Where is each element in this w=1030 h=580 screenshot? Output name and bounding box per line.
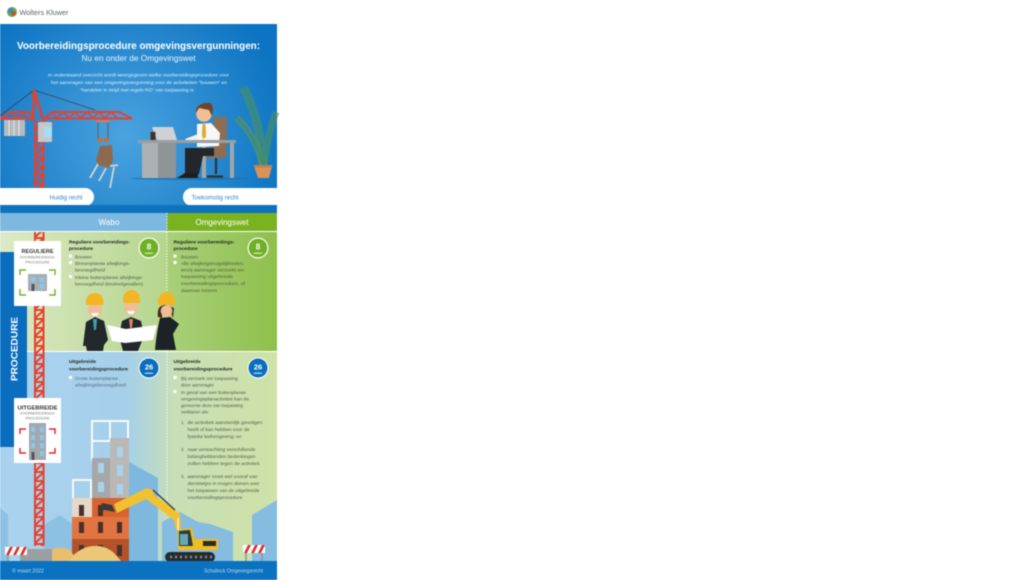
text: reguliere, Omgevingswet: procedure xyxy=(174,246,198,252)
text: reguliere, Wabo: Reguliere voorbereidings- xyxy=(69,240,130,246)
text: reguliere, Wabo: Kleine buitenplanse afwijkings- xyxy=(75,275,143,280)
text: uitgebreide, Omgevingswet: voorbereidingsprocedure xyxy=(188,495,243,500)
intro text: In onderstaand overzicht wordt weergegeven welke voorbereidingsprocedure voor xyxy=(48,72,230,78)
worker left xyxy=(83,293,108,351)
text: uitgebreide, Omgevingswet: voorbereidingsprocedure xyxy=(174,366,233,372)
card: uitgebreide voorbereidingsprocedure: PROCEDURE xyxy=(25,416,50,420)
badge: 26 weken, Omgevingswet: weken xyxy=(253,371,263,375)
text: uitgebreide, Wabo: voorbereidingsprocedure xyxy=(69,366,128,372)
text: uitgebreide, Omgevingswet: Bij verzoek om toepassing xyxy=(181,376,238,381)
head xyxy=(196,103,213,122)
badge: 26 weken, Wabo xyxy=(138,358,160,378)
text: uitgebreide, Wabo: Grote buitenplanse xyxy=(75,376,118,381)
illustration: man at desk xyxy=(130,87,276,180)
text: uitgebreide, Omgevingswet: 1. xyxy=(181,420,185,425)
subtitle: Nu en onder de Omgevingswet xyxy=(82,54,196,63)
card: uitgebreide voorbereidingsprocedure: VOORBEREIDINGS- xyxy=(20,412,56,416)
text: reguliere, Omgevingswet: Bouwen xyxy=(181,254,198,260)
text: uitgebreide, Wabo: Uitgebreide xyxy=(69,359,96,365)
text: reguliere, Omgevingswet: Reguliere voorbereidings- xyxy=(174,240,235,246)
footer: © maart 2022 xyxy=(12,568,44,574)
text: reguliere, Omgevingswet: voorbereidingsprocedure, of xyxy=(181,281,246,286)
text: uitgebreide, Omgevingswet: dienstwijze in mogen dienen over xyxy=(188,481,260,486)
intro text: "handelen in strijd met regels RO" van toepassing is. xyxy=(80,88,195,92)
text: uitgebreide, Wabo: afwijkingsbevoegdheid xyxy=(75,382,126,388)
barrier right xyxy=(243,545,265,561)
badge: 8 weken, Omgevingswet xyxy=(248,238,268,258)
badge: 26 weken, Omgevingswet xyxy=(248,358,268,378)
text: uitgebreide, Omgevingswet: fysieke leefomgeving; en xyxy=(188,434,242,439)
text: uitgebreide, Omgevingswet: 2. xyxy=(181,447,185,452)
text: reguliere, Omgevingswet: Alle afwijkingsmogelijkheden, xyxy=(181,261,244,266)
torso xyxy=(185,123,220,147)
column header: Wabo: Wabo xyxy=(98,218,120,227)
barrier left xyxy=(5,547,27,561)
text: reguliere, Wabo: bevoegdheid (kruimelgevallen) xyxy=(75,282,143,286)
illustration: three workers with plan xyxy=(83,290,179,351)
badge: 8 weken, Wabo: 8 xyxy=(147,242,152,252)
text: uitgebreide, Omgevingswet: Uitgebreide xyxy=(174,359,201,365)
crane load: container xyxy=(4,120,25,136)
trousers and shoes xyxy=(177,148,214,178)
crane cabin xyxy=(38,122,52,142)
card: reguliere voorbereidingsprocedure: VOORBEREIDINGS- xyxy=(20,256,56,260)
text: uitgebreide, Omgevingswet: 3. xyxy=(181,474,185,479)
worker right xyxy=(155,292,179,350)
text: reguliere, Omgevingswet xyxy=(174,240,246,293)
text: uitgebreide, Wabo xyxy=(69,359,128,388)
sidebar: procedure xyxy=(0,252,27,447)
badge: 8 weken, Omgevingswet: weken xyxy=(253,251,263,255)
worker centre xyxy=(119,290,144,351)
intro text xyxy=(48,72,230,92)
panel: row 1 backgrounds xyxy=(0,232,277,351)
badge: 8 weken, Wabo xyxy=(138,238,160,258)
card: reguliere voorbereidingsprocedure xyxy=(14,241,61,306)
desk xyxy=(142,143,234,178)
text: uitgebreide, Omgevingswet: naar verwachting verschillende xyxy=(188,447,256,452)
column header: Omgevingswet xyxy=(167,213,277,231)
panel: header hero xyxy=(0,24,277,205)
text: uitgebreide, Omgevingswet: door aanvrager xyxy=(181,382,214,388)
text: uitgebreide, Omgevingswet: de activiteit aanzienlijk gevolgen xyxy=(188,420,263,425)
text: reguliere, Omgevingswet: tenzij aanvrager verzoekt om xyxy=(181,268,244,272)
column header: Wabo xyxy=(0,213,167,231)
panel: row 2 backgrounds xyxy=(0,352,277,561)
footer: Schulinck Omgevingsrecht xyxy=(204,568,264,574)
text: uitgebreide, Omgevingswet: omgevingsplanactiviteit kan de xyxy=(181,396,249,402)
badge: 26 weken, Omgevingswet: 26 xyxy=(254,362,262,372)
text: reguliere, Wabo xyxy=(69,240,143,286)
badge: 8 weken, Wabo: weken xyxy=(144,251,154,255)
intro text: het aanvragen van een omgevingsvergunning voor de activiteiten "bouwen" en xyxy=(51,80,228,85)
text: reguliere, Wabo: procedure xyxy=(69,246,93,252)
illustration: building under construction xyxy=(72,421,129,561)
text: reguliere, Wabo: bevoegdheid xyxy=(75,268,106,272)
text: reguliere, Omgevingswet: toepassing uitgebreide xyxy=(181,274,233,279)
plan xyxy=(107,325,157,343)
plant xyxy=(237,87,276,178)
card: uitgebreide voorbereidingsprocedure xyxy=(14,398,61,463)
text: reguliere, Wabo: Binnenplanse afwijkings- xyxy=(75,261,131,266)
chair xyxy=(190,117,227,176)
text: reguliere, Wabo: Bouwen xyxy=(75,254,92,260)
logo: Wolters Kluwer: Wolters Kluwer xyxy=(20,8,69,17)
illustration: pipes xyxy=(20,549,52,561)
crane hook with excavator bucket xyxy=(90,120,118,188)
text: uitgebreide, Omgevingswet: aanvrager moet wel vooraf van xyxy=(188,474,258,479)
illustration: sand piles xyxy=(39,546,121,561)
pill: Huidig recht: Huidig recht xyxy=(50,196,83,202)
text: uitgebreide, Omgevingswet: zullen hebben tegen de activiteit xyxy=(188,461,260,466)
crane mast lower section xyxy=(34,232,44,546)
text: uitgebreide, Omgevingswet: belanghebbenden bedenkingen xyxy=(188,454,256,459)
badge: 8 weken, Omgevingswet: 8 xyxy=(256,242,261,252)
card: reguliere voorbereidingsprocedure: PROCEDURE xyxy=(25,260,50,264)
footer xyxy=(0,561,277,580)
text: uitgebreide, Omgevingswet: In geval van een buitenplanse xyxy=(181,390,246,395)
sidebar: procedure: PROCEDURE xyxy=(10,317,21,381)
text: uitgebreide, Omgevingswet: het toepassen van de uitgebreide xyxy=(188,488,260,493)
illustration: excavator xyxy=(114,488,218,562)
pill: Toekomstig recht: Toekomstig recht xyxy=(192,196,239,202)
text: uitgebreide, Omgevingswet: gemeente deze van toepassing xyxy=(181,403,243,408)
title: Voorbereidingsprocedure omgevingsvergunningen: xyxy=(17,41,260,52)
badge: 26 weken, Wabo: weken xyxy=(144,371,154,375)
text: uitgebreide, Omgevingswet: heeft of kan hebben voor de xyxy=(188,427,250,432)
logo: Wolters Kluwer xyxy=(7,7,69,17)
text: uitgebreide, Omgevingswet xyxy=(174,359,263,500)
laptop xyxy=(150,127,177,140)
card: reguliere voorbereidingsprocedure: REGULIERE xyxy=(22,249,54,255)
badge: 26 weken, Wabo: 26 xyxy=(145,362,153,372)
pill: Huidig recht xyxy=(0,188,94,206)
text: uitgebreide, Omgevingswet: verklaren als: xyxy=(181,410,209,414)
card: uitgebreide voorbereidingsprocedure: UITGEBREIDE xyxy=(18,406,58,412)
illustration: tower crane xyxy=(0,90,132,205)
text: reguliere, Omgevingswet: daarmee instemt xyxy=(181,288,218,293)
pill: Toekomstig recht xyxy=(183,188,289,206)
column header: Omgevingswet: Omgevingswet xyxy=(196,218,249,227)
